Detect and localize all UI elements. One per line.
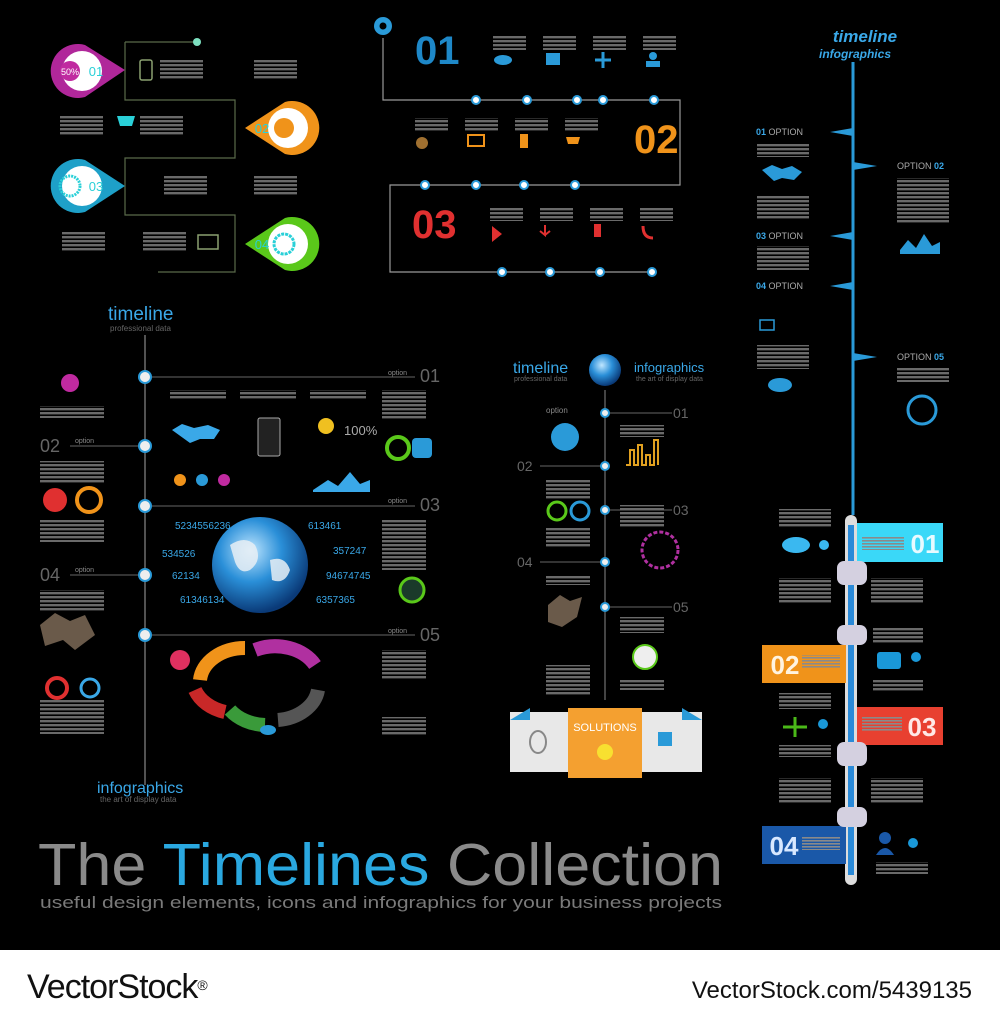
slider knobs bbox=[837, 561, 867, 827]
globe numbers: 613461 bbox=[308, 521, 342, 532]
heading: timeline bbox=[513, 360, 568, 377]
heading: timeline infographics bbox=[819, 27, 897, 61]
solutions banner: SOLUTIONS bbox=[573, 722, 637, 734]
panel: middle-left timeline with globe: 03 bbox=[420, 495, 440, 515]
box 04 bbox=[762, 826, 846, 864]
option labels bbox=[756, 127, 944, 362]
panel: middle-center timeline: 01 bbox=[673, 405, 689, 421]
heading bbox=[513, 354, 705, 386]
globe numbers: 534526 bbox=[162, 549, 196, 560]
icon: pin blue 03: 03 bbox=[89, 179, 103, 194]
option labels: 01 OPTION bbox=[756, 127, 803, 137]
box 02 bbox=[762, 645, 846, 683]
heading: the art of display data bbox=[636, 376, 703, 383]
globe numbers: 61346134 bbox=[180, 595, 225, 606]
panel: middle-left timeline with globe: option bbox=[388, 370, 407, 377]
panel: middle-left timeline with globe: 04 bbox=[40, 565, 60, 585]
icon: pin magenta 01 bbox=[51, 44, 125, 98]
panel: middle-center timeline bbox=[510, 354, 705, 778]
text blocks bbox=[60, 38, 297, 252]
slider track bbox=[845, 515, 857, 885]
box 01 bbox=[857, 523, 943, 562]
option labels: OPTION 02 bbox=[897, 161, 944, 171]
heading: timeline: timeline bbox=[108, 304, 173, 325]
icon: pin magenta 01: 01 bbox=[89, 64, 103, 79]
globe numbers: 94674745 bbox=[326, 571, 371, 582]
heading: timeline: professional data bbox=[110, 324, 171, 333]
icon: pin orange 02: 02 bbox=[255, 121, 269, 136]
icon: location pin bbox=[374, 17, 392, 35]
globe numbers: 6357365 bbox=[316, 595, 355, 606]
panel: middle-left timeline with globe bbox=[40, 304, 440, 804]
panel: middle-left timeline with globe: option bbox=[388, 498, 407, 505]
cycle diagram bbox=[170, 646, 318, 735]
icon: pin orange 02 bbox=[245, 101, 319, 155]
number 02: 02 bbox=[634, 118, 678, 162]
panel: middle-center timeline: option bbox=[546, 406, 568, 415]
panel: middle-center timeline: 05 bbox=[673, 599, 689, 615]
option labels: 03 OPTION bbox=[756, 231, 803, 241]
subtitle: useful design elements, icons and infographics for your business projects bbox=[40, 893, 722, 912]
icon: pin magenta 01: 50% bbox=[61, 67, 79, 77]
panel: middle-left timeline with globe: option bbox=[388, 628, 407, 635]
icon: pin green 04 bbox=[245, 217, 319, 271]
box 03: 03 bbox=[908, 712, 936, 742]
footer watermark band bbox=[0, 950, 1000, 1027]
box 01: 01 bbox=[911, 529, 939, 559]
box 03 bbox=[857, 707, 943, 745]
box 04: 04 bbox=[770, 831, 799, 861]
solutions banner bbox=[510, 708, 702, 778]
heading: timeline infographics: timeline bbox=[833, 27, 897, 46]
panel: middle-left timeline with globe: option bbox=[75, 438, 94, 445]
option labels: OPTION 05 bbox=[897, 352, 944, 362]
number 01: 01 bbox=[415, 29, 460, 73]
heading: timeline infographics: infographics bbox=[819, 47, 891, 61]
globe numbers: 5234556236 bbox=[175, 521, 231, 532]
heading: infographics: the art of display data bbox=[100, 795, 177, 804]
panel: middle-left timeline with globe: 100% bbox=[344, 423, 378, 438]
panel: middle-left timeline with globe: 05 bbox=[420, 625, 440, 645]
panel: right slider timeline bbox=[762, 509, 943, 885]
title: The Timelines Collection bbox=[38, 832, 723, 898]
panel: middle-left timeline with globe: option bbox=[75, 567, 94, 574]
heading: infographics: infographics bbox=[97, 780, 183, 797]
footer watermark band: VectorStock® bbox=[27, 968, 208, 1006]
globe bbox=[212, 517, 308, 613]
panel: middle-center timeline: 04 bbox=[517, 554, 533, 570]
panel: right vertical options timeline bbox=[756, 27, 949, 515]
panel: middle-left timeline with globe: 02 bbox=[40, 436, 60, 456]
heading: infographics bbox=[634, 360, 705, 375]
globe numbers: 62134 bbox=[172, 571, 200, 582]
globe numbers: 357247 bbox=[333, 546, 367, 557]
globe numbers bbox=[162, 521, 371, 606]
heading: professional data bbox=[514, 376, 567, 383]
footer watermark band: VectorStock.com/5439135 bbox=[692, 977, 972, 1004]
box 02: 02 bbox=[771, 650, 799, 680]
number 03: 03 bbox=[412, 203, 456, 247]
panel: middle-center timeline: 02 bbox=[517, 458, 533, 474]
option labels: 04 OPTION bbox=[756, 281, 803, 291]
panel: top-left pin timeline bbox=[51, 38, 319, 272]
panel: top-middle numbered timeline bbox=[374, 17, 680, 276]
icon: pin green 04: 04 bbox=[255, 237, 269, 252]
panel: middle-left timeline with globe: 01 bbox=[420, 366, 440, 386]
icon: pin blue 03 bbox=[51, 159, 125, 213]
panel: middle-center timeline: 03 bbox=[673, 502, 689, 518]
